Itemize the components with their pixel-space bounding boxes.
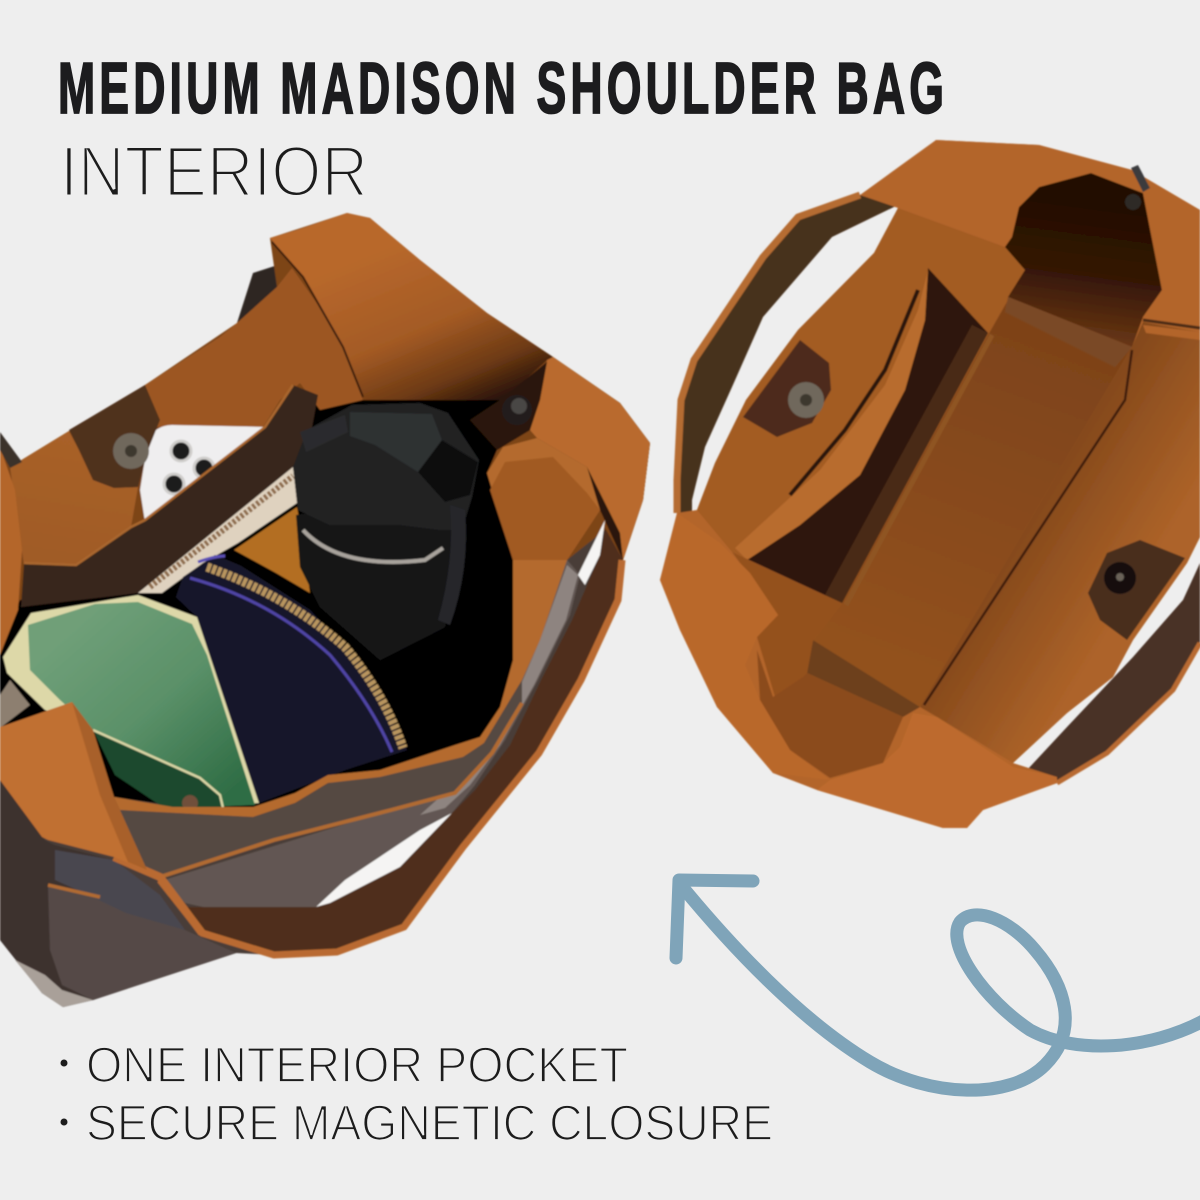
floor seam	[924, 350, 1132, 705]
right bag lower handle	[1027, 563, 1200, 790]
floor far band	[1005, 297, 1132, 367]
shoulder strap suede edge	[160, 560, 622, 955]
body pocket edge	[48, 885, 100, 897]
side leather strip	[55, 850, 185, 930]
handle suede edge	[677, 195, 860, 513]
right bag bottom flap	[817, 713, 1057, 828]
phone	[140, 425, 268, 522]
curly arrow pointing to right bag	[676, 880, 1200, 1090]
right bag interior pocket	[735, 268, 992, 605]
front suede flap	[0, 702, 147, 870]
bottom edge of body	[15, 960, 93, 1007]
green pouch	[3, 595, 259, 812]
zipper strip behind green pouch	[0, 680, 30, 728]
front wall leather	[120, 680, 522, 877]
left bag inner suede wall	[10, 431, 138, 565]
corner suede wall	[732, 552, 842, 697]
subtitle: INTERIOR	[60, 133, 368, 212]
left bag photo: packed bag	[0, 213, 650, 1007]
strap seam band	[114, 857, 202, 933]
shoulder strap	[168, 528, 623, 955]
leather between rim and strap	[164, 560, 580, 913]
flap seam	[272, 242, 363, 397]
alcove	[1005, 173, 1162, 347]
right pocket tab	[1088, 540, 1185, 640]
left bag far strap	[237, 262, 290, 323]
right bag floor	[813, 300, 1132, 707]
left bag alcove and rear snap	[470, 362, 547, 450]
title: MEDIUM MADISON SHOULDER BAG	[58, 48, 944, 129]
bottle lid	[293, 403, 479, 530]
pouch zipper	[207, 567, 403, 748]
right bag left wall	[697, 208, 1040, 603]
tan pouch panel	[234, 507, 310, 593]
bullet list	[60, 1037, 773, 1151]
feature: secure magnetic closure: SECURE MAGNETIC CLOSURE	[86, 1095, 773, 1151]
magnetic snap	[113, 433, 149, 469]
phone cameras	[164, 441, 214, 494]
feature: one interior pocket: ONE INTERIOR POCKET	[86, 1037, 628, 1093]
navy pouch	[176, 555, 407, 803]
right bag metal rivet	[1131, 165, 1150, 192]
left side strap	[0, 447, 22, 655]
right bag top flap	[860, 140, 1200, 325]
left bag upper silhouette	[0, 213, 650, 680]
left bag lower silhouette	[0, 530, 623, 1007]
left bag back flap	[270, 213, 650, 560]
lower body leather	[0, 780, 236, 1007]
pocket tab	[743, 340, 831, 437]
bullet two	[60, 1118, 68, 1126]
second pocket rim	[160, 703, 522, 877]
lower floor suede	[757, 650, 903, 778]
left bag interior pocket	[21, 385, 318, 607]
pouch rivet	[182, 795, 198, 811]
floor near band	[807, 640, 920, 717]
snap tab	[69, 385, 160, 488]
arrow shaft	[680, 884, 1200, 1090]
right bag left snap	[788, 382, 824, 418]
right bag handle	[677, 195, 898, 520]
zipper tape	[138, 467, 297, 593]
right bag photo: empty bag interior	[660, 140, 1200, 828]
right bag right snap	[1104, 562, 1136, 594]
bullet one	[60, 1060, 68, 1066]
white gap lower	[316, 813, 452, 907]
right bag silhouette	[660, 140, 1200, 828]
right bag right wall	[920, 322, 1200, 763]
left bag upper wall	[145, 268, 363, 427]
right bag left flap	[660, 513, 830, 780]
front wall rim	[114, 438, 600, 817]
white gap upper	[578, 520, 605, 585]
arrow head	[676, 880, 753, 958]
left bag interior	[0, 400, 530, 817]
black bottle	[293, 403, 479, 660]
